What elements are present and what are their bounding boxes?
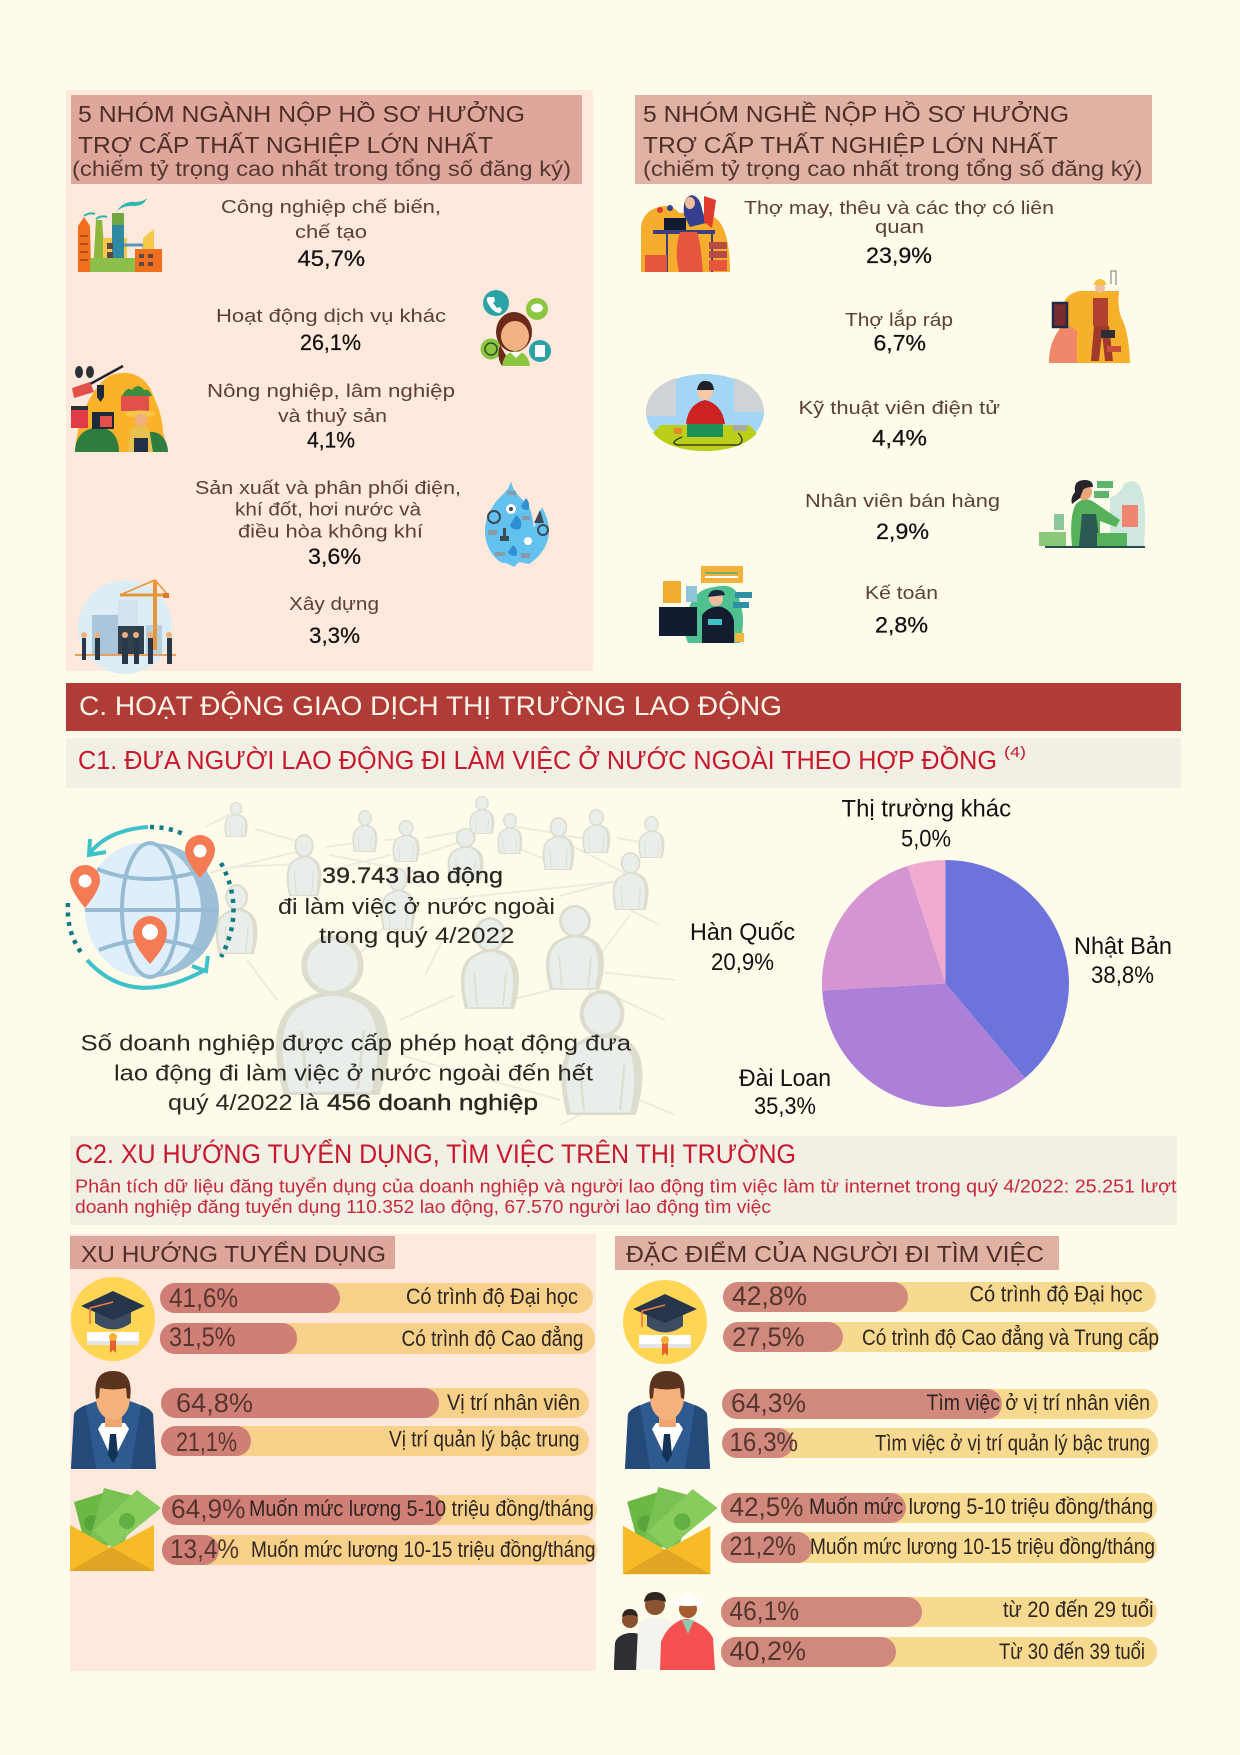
heading: C2 with description: Phân tích dữ liệu đăng tuyển dụng của doanh nghiệp và người lao động tìm việc làm từ internet trong quý 4/2022: 25.251 lượt (75, 1176, 1176, 1196)
panel: top occupations (635, 95, 1152, 643)
bar: college (160, 1322, 595, 1354)
bar: middle manager (722, 1427, 1158, 1458)
item: electricity: Sản xuất và phân phối điện, (195, 478, 461, 498)
background: people network (205, 796, 675, 1125)
bar: middle manager: Tìm việc ở vị trí quản lý bậc trung (875, 1430, 1150, 1456)
icon: employee (71, 1371, 156, 1469)
bar: middle manager: Vị trí quản lý bậc trung (389, 1426, 580, 1452)
item: assemblers (845, 309, 953, 356)
label: other markets (842, 796, 1011, 852)
label: other markets: 5,0% (901, 826, 951, 852)
heading: C2 with description: doanh nghiệp đăng tuyển dụng 110.352 lao động, 67.570 người lao động tìm việc (75, 1197, 771, 1217)
stat: licensed companies: 456 doanh nghiệp (327, 1090, 538, 1115)
label: Japan: 38,8% (1091, 962, 1154, 989)
bar: college and vocational: Có trình độ Cao đẳng và Trung cấp (862, 1325, 1159, 1350)
bar: salary 10-15: 13,4% (170, 1534, 239, 1564)
bar: college: 31,5% (169, 1322, 236, 1352)
bar: staff position: 64,3% (731, 1388, 806, 1418)
bar: age 20-29: 46,1% (730, 1596, 799, 1626)
bar: staff position: Vị trí nhân viên (447, 1390, 580, 1415)
icon: globe with pins (68, 827, 234, 988)
label: South Korea: 20,9% (711, 949, 774, 976)
icon: group of people (614, 1592, 715, 1670)
heading: C1 (66, 738, 1181, 788)
item: manufacturing: 45,7% (298, 246, 365, 271)
heading: industries: TRỢ CẤP THẤT NGHIỆP LỚN NHẤT (78, 131, 493, 158)
item: electricity: điều hòa không khí (238, 522, 423, 542)
icon: tailor (641, 195, 730, 272)
stat: licensed companies: Số doanh nghiệp được cấp phép hoạt động đưa (80, 1030, 632, 1056)
bar: middle manager: 21,1% (176, 1427, 237, 1457)
bar: salary 10-15: Muốn mức lương 10-15 triệu đồng/tháng (810, 1534, 1155, 1559)
icon: assembler (1049, 271, 1130, 363)
bar: college and vocational (723, 1322, 1159, 1352)
bar: staff position (722, 1388, 1158, 1419)
bar: middle manager: 16,3% (730, 1427, 798, 1457)
label: Taiwan (739, 1065, 831, 1120)
item: accounting: Kế toán (865, 583, 938, 603)
item: sales (805, 491, 1000, 544)
heading: C2 with description (70, 1136, 1177, 1225)
heading: job seekers: ĐẶC ĐIỂM CỦA NGƯỜI ĐI TÌM VIỆC (626, 1239, 1044, 1267)
heading: industries: 5 NHÓM NGÀNH NỘP HỒ SƠ HƯỞNG (78, 99, 525, 127)
item: tailors: 23,9% (866, 243, 932, 268)
bar: salary 10-15 (162, 1534, 597, 1565)
bar: university: 41,6% (169, 1283, 238, 1313)
heading: C1: C1. ĐƯA NGƯỜI LAO ĐỘNG ĐI LÀM VIỆC Ở NƯỚC NGOÀI THEO HỢP ĐỒNG (78, 744, 997, 775)
bar: college: Có trình độ Cao đẳng (402, 1326, 584, 1351)
bar: salary 5-10 (721, 1492, 1157, 1523)
item: tailors: Thợ may, thêu và các thợ có liên (744, 198, 1054, 218)
item: manufacturing: Công nghiệp chế biến, (221, 197, 441, 217)
stat: workers abroad: trong quý 4/2022 (319, 923, 514, 948)
item: construction (289, 594, 379, 648)
bar: salary 10-15 (721, 1531, 1157, 1563)
item: tailors (744, 198, 1054, 268)
item: accounting: 2,8% (875, 612, 928, 638)
icon: accountant (659, 566, 752, 643)
item: sales: 2,9% (876, 519, 929, 544)
icon: salary envelope (70, 1488, 161, 1571)
icon: construction (75, 580, 176, 674)
label: South Korea (690, 919, 795, 976)
heading: occupations (635, 95, 1152, 184)
item: other services: 26,1% (300, 330, 361, 355)
item: manufacturing: chế tạo (295, 222, 367, 242)
bar: age 20-29: từ 20 đến 29 tuổi (1003, 1597, 1154, 1622)
bar: university (160, 1283, 593, 1313)
label: Japan (1074, 933, 1172, 989)
stat: licensed companies: quý 4/2022 là (168, 1090, 320, 1115)
stat: workers abroad: đi làm việc ở nước ngoài (278, 894, 555, 919)
bar: university: Có trình độ Đại học (970, 1282, 1142, 1306)
banner: section C: C. HOẠT ĐỘNG GIAO DỊCH THỊ TRƯỜNG LAO ĐỘNG (79, 690, 782, 721)
item: agriculture: và thuỷ sản (278, 406, 387, 426)
item: electronics (798, 398, 1000, 450)
item: electricity: 3,6% (308, 544, 361, 569)
item: assemblers: Thợ lắp ráp (845, 309, 953, 330)
label: South Korea: Hàn Quốc (690, 919, 795, 946)
heading: recruitment trends (70, 1236, 395, 1269)
panel: recruitment trends (70, 1234, 597, 1671)
item: sales: Nhân viên bán hàng (805, 491, 1000, 511)
heading: occupations: TRỢ CẤP THẤT NGHIỆP LỚN NHẤT (643, 131, 1058, 158)
bar: age 20-29 (721, 1596, 1157, 1627)
bar: salary 5-10: Muốn mức lương 5-10 triệu đồng/tháng (249, 1496, 594, 1521)
icon: farmer (71, 366, 168, 452)
icon: graduation cap (623, 1280, 707, 1364)
heading: C2 with description: C2. XU HƯỚNG TUYỂN DỤNG, TÌM VIỆC TRÊN THỊ TRƯỜNG (75, 1139, 796, 1169)
item: agriculture (207, 381, 455, 452)
heading: C1: (4) (1004, 744, 1026, 761)
label: Taiwan: 35,3% (754, 1093, 816, 1120)
icon: salesperson (1039, 480, 1145, 547)
bar: age 30-39: Từ 30 đến 39 tuổi (999, 1639, 1145, 1664)
item: electricity: khí đốt, hơi nước và (235, 500, 422, 520)
banner: section C (66, 683, 1181, 731)
heading: job seekers (615, 1236, 1059, 1270)
stat: workers abroad (278, 863, 555, 948)
heading: recruitment trends: XU HƯỚNG TUYỂN DỤNG (81, 1240, 386, 1267)
bar: staff position: Tìm việc ở vị trí nhân viên (926, 1390, 1150, 1415)
heading: industries (71, 95, 582, 184)
bar: college and vocational: 27,5% (732, 1322, 804, 1352)
item: assemblers: 6,7% (874, 330, 926, 356)
bar: university: Có trình độ Đại học (406, 1284, 578, 1309)
bar: age 30-39: 40,2% (730, 1636, 806, 1666)
bar: staff position (161, 1388, 589, 1418)
icon: salary envelope (623, 1487, 718, 1574)
item: tailors: quan (875, 217, 924, 237)
item: electronics: 4,4% (872, 426, 927, 450)
label: Taiwan: Đài Loan (739, 1065, 831, 1092)
icon: flame utilities (485, 481, 549, 567)
panel: top industries (66, 90, 593, 674)
stat: workers abroad: 39.743 lao động (322, 863, 503, 888)
item: construction: Xây dựng (289, 594, 379, 614)
label: other markets: Thị trường khác (842, 796, 1011, 822)
bar: salary 5-10: 42,5% (730, 1492, 804, 1522)
pie chart: labour markets (690, 796, 1172, 1120)
stat: licensed companies (80, 1030, 632, 1115)
item: agriculture: Nông nghiệp, lâm nghiệp (207, 381, 455, 401)
item: accounting (865, 583, 938, 638)
heading: occupations: 5 NHÓM NGHỀ NỘP HỒ SƠ HƯỞNG (643, 99, 1069, 127)
bar: university (723, 1281, 1156, 1312)
bar: salary 5-10: Muốn mức lương 5-10 triệu đồng/tháng (809, 1494, 1154, 1519)
item: electronics: Kỹ thuật viên điện tử (798, 398, 1000, 418)
heading: industries: (chiếm tỷ trọng cao nhất trong tổng số đăng ký) (72, 158, 571, 181)
item: construction: 3,3% (309, 623, 360, 648)
item: other services (216, 306, 446, 355)
icon: employee (625, 1371, 710, 1469)
heading: occupations: (chiếm tỷ trọng cao nhất trong tổng số đăng ký) (643, 158, 1142, 181)
bar: staff position: 64,8% (176, 1388, 253, 1418)
item: other services: Hoạt động dịch vụ khác (216, 306, 446, 326)
panel: job seeker characteristics (614, 1236, 1159, 1670)
icon: factory (78, 198, 162, 272)
bar: salary 5-10: 64,9% (171, 1494, 246, 1524)
bar: salary 5-10 (162, 1494, 597, 1525)
item: electricity (195, 478, 461, 569)
stat: licensed companies: lao động đi làm việc ở nước ngoài đến hết (114, 1060, 593, 1086)
item: agriculture: 4,1% (307, 428, 355, 452)
icon: graduation cap (71, 1277, 155, 1361)
bar: middle manager (161, 1426, 589, 1457)
icon: call center (480, 290, 551, 366)
bar: salary 10-15: Muốn mức lương 10-15 triệu đồng/tháng (251, 1537, 596, 1562)
label: Japan: Nhật Bản (1074, 933, 1172, 960)
icon: electronics technician (646, 374, 764, 451)
bar: salary 10-15: 21,2% (730, 1531, 796, 1561)
bar: university: 42,8% (732, 1281, 807, 1311)
bar: age 30-39 (721, 1636, 1157, 1667)
item: manufacturing (221, 197, 441, 271)
